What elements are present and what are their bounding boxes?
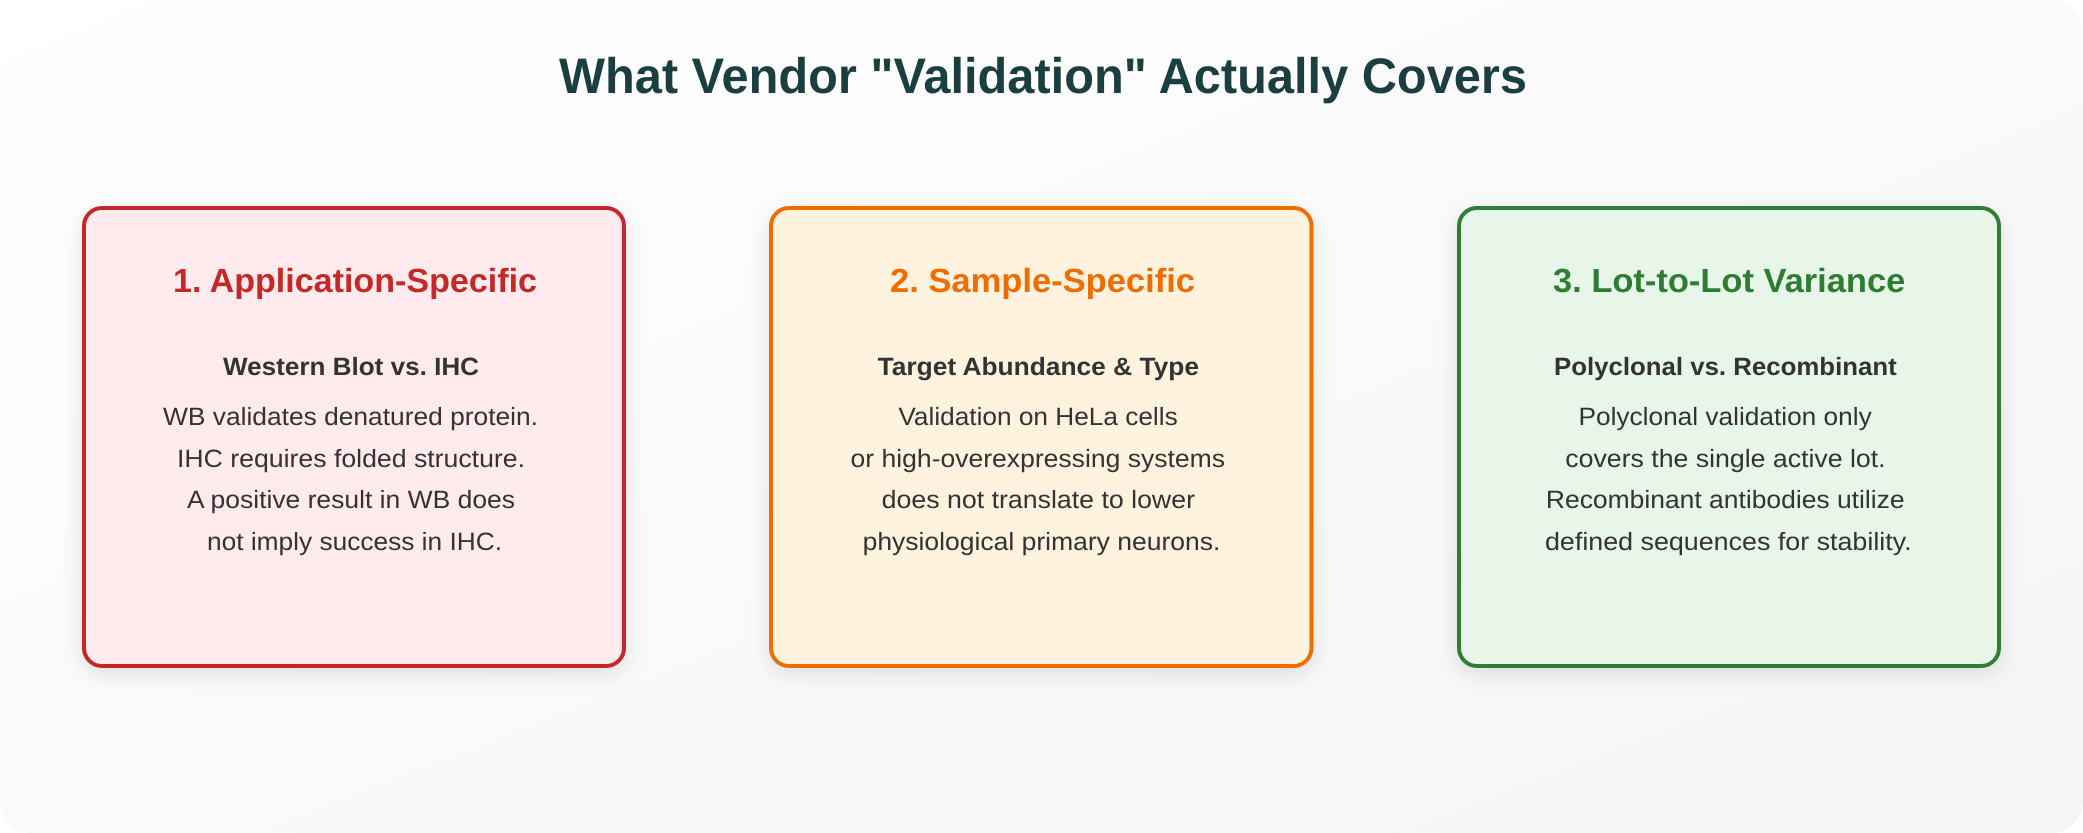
body text: covers the single active lot. xyxy=(1565,445,1886,473)
body text xyxy=(850,403,1225,556)
body text: or high-overexpressing systems xyxy=(850,445,1225,473)
panel: application-specific xyxy=(84,208,624,666)
body text: physiological primary neurons. xyxy=(863,528,1220,556)
panel: sample-specific xyxy=(771,208,1312,666)
heading: lot-to-lot variance: 3. Lot-to-Lot Variance xyxy=(1553,263,1905,300)
card background xyxy=(771,208,1312,666)
subheading: target abundance and type: Target Abundance & Type xyxy=(878,353,1199,381)
body text xyxy=(163,403,538,556)
body text: does not translate to lower xyxy=(882,486,1195,514)
subheading: polyclonal vs recombinant: Polyclonal vs. Recombinant xyxy=(1554,353,1897,381)
body text xyxy=(1545,403,1912,556)
body text: Validation on HeLa cells xyxy=(898,403,1178,431)
card background xyxy=(84,208,624,666)
body text: A positive result in WB does xyxy=(187,486,515,514)
body text: IHC requires folded structure. xyxy=(177,445,525,473)
subheading: western blot vs IHC: Western Blot vs. IHC xyxy=(223,353,479,381)
panel: lot-to-lot variance xyxy=(1459,208,1999,666)
body text: defined sequences for stability. xyxy=(1545,528,1912,556)
heading: sample-specific: 2. Sample-Specific xyxy=(890,263,1195,300)
card background xyxy=(1459,208,1999,666)
body text: WB validates denatured protein. xyxy=(163,403,538,431)
title: What Vendor "Validation" Actually Covers xyxy=(559,48,1527,104)
body text: Polyclonal validation only xyxy=(1578,403,1872,431)
body text: not imply success in IHC. xyxy=(207,528,502,556)
heading: application-specific: 1. Application-Specific xyxy=(173,263,537,300)
body text: Recombinant antibodies utilize xyxy=(1546,486,1905,514)
